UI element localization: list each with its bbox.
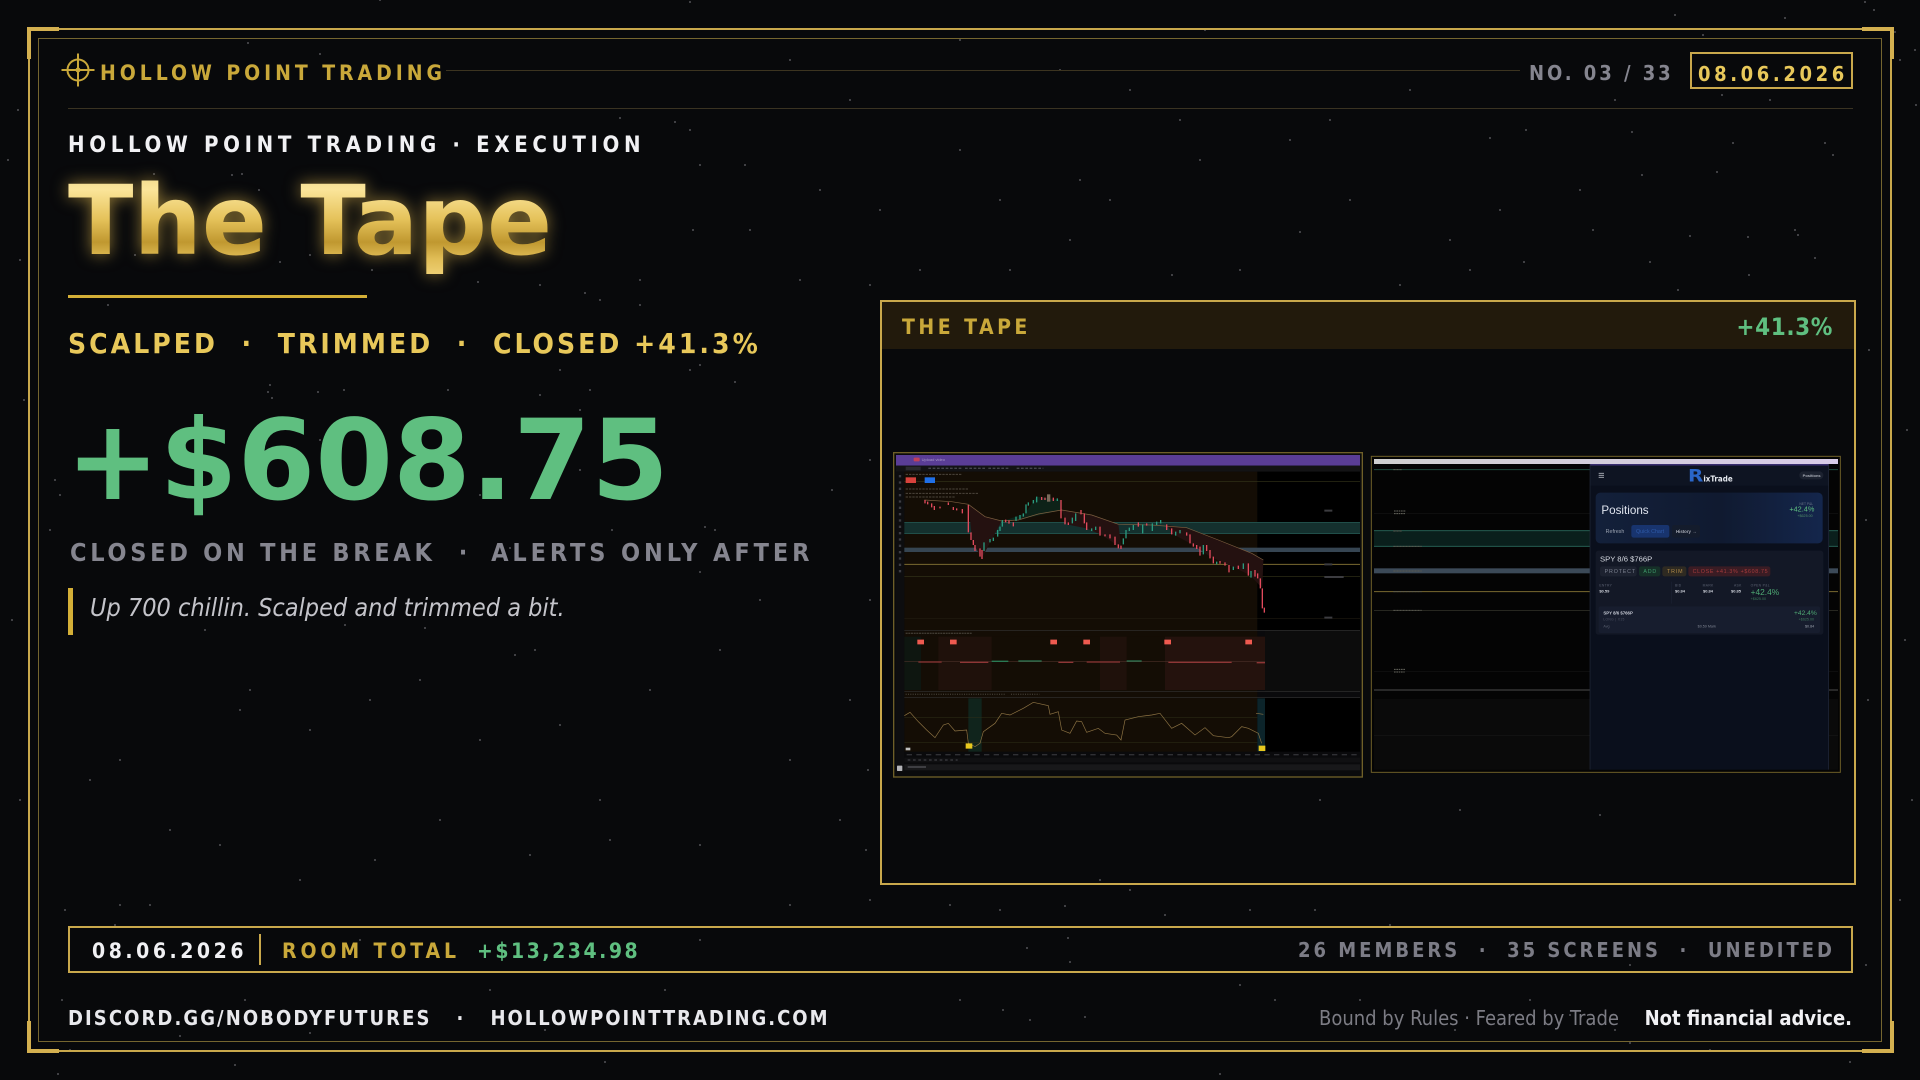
- tagline: SCALPED · TRIMMED · CLOSED +41.3%: [68, 327, 761, 360]
- room total value: +$13,234.98: [477, 938, 640, 962]
- positions screenshot: TRIM: [1667, 569, 1683, 575]
- brand name: HOLLOW POINT TRADING: [100, 60, 446, 84]
- disclaimer: Not financial advice.: [1645, 1006, 1852, 1030]
- positions screenshot: +42.4%: [1794, 610, 1817, 617]
- quote bar: [68, 588, 73, 635]
- positions screenshot: Positions: [1601, 504, 1649, 517]
- positions screenshot: $0.59 Mark: [1698, 624, 1716, 628]
- positions screenshot: Quick Chart: [1636, 529, 1665, 535]
- positions screenshot: $0.84: [1675, 589, 1686, 594]
- positions screenshot: LONG | X15: [1603, 617, 1625, 621]
- title rule: [68, 295, 367, 298]
- profit figure: +$608.75: [66, 396, 669, 526]
- positions screenshot: +42.4%: [1751, 587, 1780, 597]
- panel heading: THE TAPE: [902, 315, 1031, 339]
- date badge: [1690, 52, 1853, 89]
- issue number: NO. 03 / 33: [1529, 61, 1674, 85]
- icon: crosshair logo: [62, 54, 94, 86]
- positions screenshot: ENTRY: [1599, 584, 1613, 588]
- positions screenshot: $0.85: [1731, 589, 1742, 594]
- positions screenshot: NET P&L: [1799, 502, 1813, 506]
- summary date: 08.06.2026: [92, 938, 247, 962]
- positions screenshot: CLOSE +41.3% +$608.75: [1693, 569, 1768, 575]
- subheading: CLOSED ON THE BREAK · ALERTS ONLY AFTER: [70, 538, 813, 567]
- positions screenshot: +$625.00: [1797, 514, 1813, 518]
- positions screenshot: R: [1688, 466, 1704, 485]
- room total label: ROOM TOTAL: [282, 938, 460, 962]
- quote note: [68, 588, 565, 635]
- footer links: DISCORD.GG/NOBODYFUTURES · HOLLOWPOINTTRADING.COM: [68, 1006, 829, 1030]
- chart screenshot: Upload video: [922, 457, 946, 462]
- positions screenshot: $0.84: [1703, 589, 1714, 594]
- panel header: [882, 302, 1854, 349]
- quote text: Up 700 chillin. Scalped and trimmed a bit.: [90, 593, 565, 622]
- title: The Tape: [68, 165, 552, 277]
- header rule: [446, 70, 1520, 71]
- summary separator: [259, 934, 261, 965]
- positions screenshot: Positions: [1803, 473, 1821, 478]
- positions screenshot: Refresh: [1606, 529, 1624, 535]
- header divider: [68, 108, 1853, 109]
- positions screenshot: MARK: [1703, 584, 1714, 588]
- footer motto: Bound by Rules · Feared by Trade: [1319, 1006, 1619, 1030]
- positions screenshot: PROTECT: [1605, 569, 1636, 575]
- date text: 08.06.2026: [1698, 62, 1848, 86]
- positions screenshot: $0.84: [1805, 624, 1814, 628]
- positions screenshot: +42.4%: [1789, 505, 1815, 514]
- positions screenshot: ASK: [1734, 584, 1742, 588]
- kicker: HOLLOW POINT TRADING · EXECUTION: [68, 133, 645, 158]
- panel percent: +41.3%: [1736, 313, 1833, 341]
- positions screenshot: History →: [1676, 529, 1696, 534]
- positions screenshot: $0.59: [1599, 589, 1610, 594]
- positions screenshot: ADD: [1643, 569, 1657, 575]
- summary stats: 26 MEMBERS · 35 SCREENS · UNEDITED: [1298, 938, 1835, 962]
- positions screenshot: SPY 8/6 $766P: [1603, 611, 1633, 616]
- positions screenshot: BID: [1675, 584, 1682, 588]
- positions screenshot: [1370, 456, 1841, 773]
- positions screenshot: ixTrade: [1703, 474, 1733, 483]
- header bar: [62, 52, 1853, 89]
- positions screenshot: Avg: [1603, 624, 1610, 628]
- summary bar: [68, 926, 1853, 973]
- chart screenshot: [893, 452, 1363, 778]
- positions screenshot: SPY 8/6 $766P: [1600, 554, 1652, 563]
- positions screenshot: OPEN P&L: [1751, 584, 1770, 588]
- panel: the tape: [880, 300, 1856, 885]
- positions screenshot: +$625.00: [1799, 617, 1814, 621]
- positions screenshot: +$625.00: [1751, 597, 1766, 601]
